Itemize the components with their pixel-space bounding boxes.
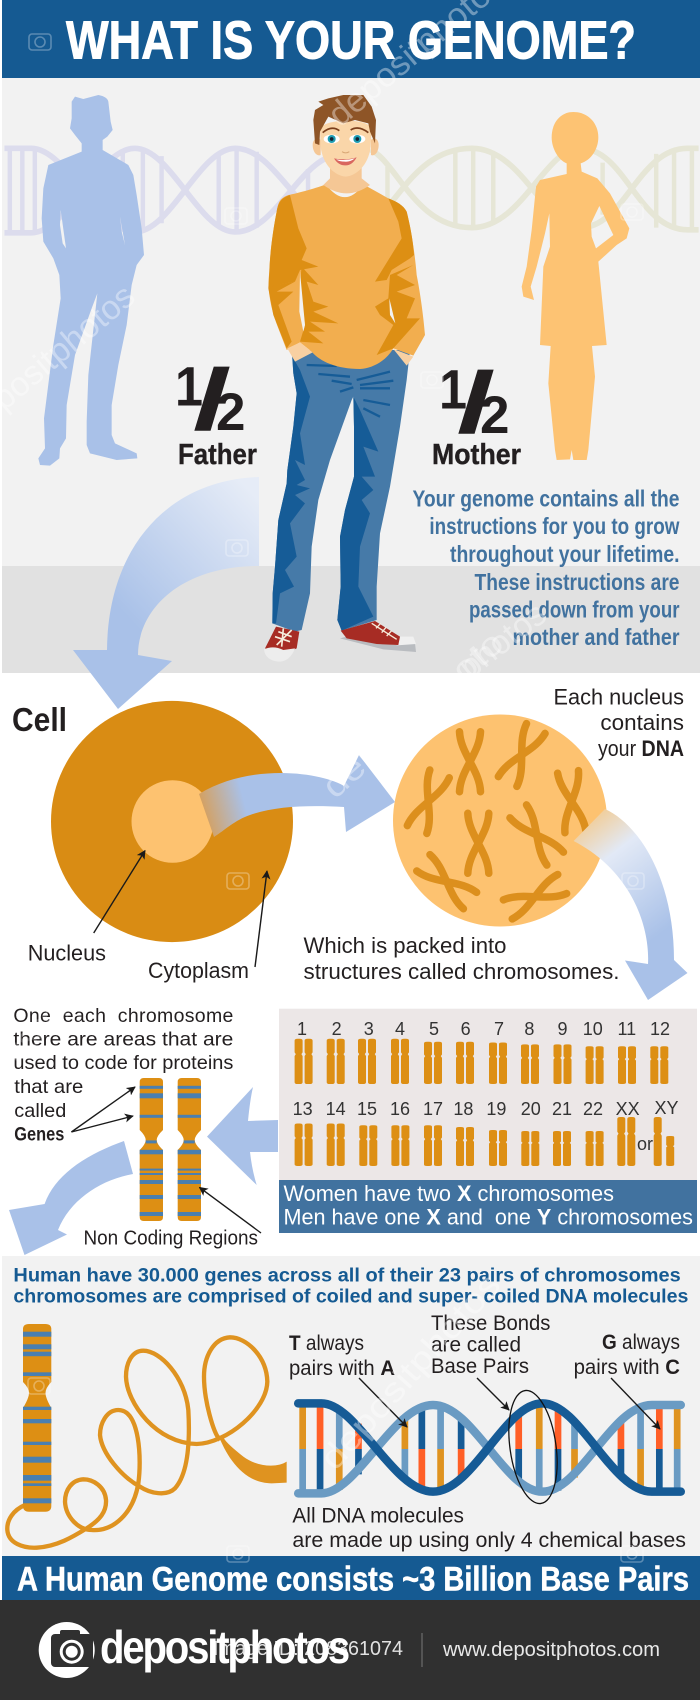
enlarged nucleus with chromosomes — [393, 714, 607, 926]
dna strand: mother side — [371, 148, 699, 230]
label: mother: Mother — [432, 439, 521, 471]
base pair highlight ellipse — [502, 1387, 564, 1507]
chart numbers: 11 — [617, 1019, 636, 1039]
text: each nucleus contains your dna — [554, 685, 684, 761]
man: nose — [342, 152, 349, 153]
label: g pairs with c — [574, 1331, 680, 1429]
chart numbers: 21 — [552, 1099, 572, 1119]
label: g pairs with c: pairs with C — [574, 1356, 680, 1379]
coiled dna strand — [7, 1337, 287, 1548]
watermarks: photos — [452, 595, 554, 686]
label: cytoplasm: Cytoplasm — [148, 958, 249, 983]
chromosome beside coil — [23, 1324, 51, 1512]
dna double helix — [298, 1403, 681, 1494]
large chromosome pair — [140, 1078, 201, 1221]
fraction: mother: / — [457, 355, 495, 451]
text: each nucleus contains your dna: Each nucleus — [554, 685, 684, 710]
man: hair — [313, 95, 376, 145]
fraction: father: / — [193, 352, 231, 448]
dark helix strand — [298, 1403, 681, 1492]
heading: cell: Cell — [12, 701, 67, 738]
image id: Image ID: 208361074 — [213, 1638, 403, 1660]
father silhouette — [38, 95, 144, 466]
man: eyebrows — [323, 128, 368, 133]
man: left shoe — [264, 627, 299, 662]
watermarks: depositphoto — [315, 624, 511, 806]
man: neck — [323, 162, 370, 193]
arrow: nucleus to chromosomes — [574, 809, 688, 1000]
man: hands — [287, 342, 413, 366]
text: genes explanation — [13, 1005, 234, 1145]
chart numbers: 13 — [293, 1099, 313, 1119]
man: gaps between arms and body — [299, 272, 395, 332]
man: ears — [313, 138, 379, 155]
text: each nucleus contains your dna: your DNA — [598, 736, 684, 761]
label: base pairs: are called — [431, 1334, 521, 1357]
chart numbers: 18 — [453, 1099, 473, 1119]
chromosome x shapes — [407, 724, 586, 919]
label: nucleus — [28, 851, 145, 966]
chart numbers: or — [637, 1134, 653, 1154]
chart numbers: 19 — [486, 1099, 506, 1119]
chart numbers: 4 — [395, 1019, 405, 1039]
heading: genes across chromosomes: chromosomes are comprised of coiled and super- coiled DNA molecules — [13, 1287, 688, 1308]
fraction: mother: 2 — [480, 386, 509, 445]
chart numbers: 7 — [494, 1019, 504, 1039]
chart numbers: 12 — [650, 1019, 670, 1039]
label: cytoplasm — [148, 871, 267, 983]
text: packed into chromosomes — [304, 933, 620, 984]
man: right shoe — [340, 621, 416, 652]
label: base pairs — [431, 1312, 550, 1410]
chart numbers: 2 — [332, 1019, 342, 1039]
arrow: nucleus to enlarged nucleus — [199, 755, 395, 837]
man: jeans and shoes — [264, 350, 416, 662]
chart numbers: 16 — [390, 1099, 410, 1119]
man: mouth — [334, 157, 357, 165]
footer — [0, 1600, 700, 1700]
heading: genes across chromosomes — [13, 1266, 688, 1308]
label: non coding regions: Non Coding Regions — [84, 1228, 258, 1250]
man figure — [264, 95, 425, 662]
man: left eye — [324, 135, 340, 143]
arrow: genes to dna — [9, 1141, 133, 1255]
label: base pairs: Base Pairs — [431, 1355, 529, 1378]
sex chromosome note — [279, 1180, 697, 1233]
chart numbers: 8 — [524, 1019, 534, 1039]
cytoplasm — [51, 701, 293, 942]
man: face — [320, 121, 372, 177]
fraction: father — [175, 352, 245, 448]
sex chromosome note: Men have one X and one Y chromosomes — [284, 1205, 693, 1230]
sex chromosome note: Women have two X chromosomes — [284, 1181, 614, 1206]
mother silhouette — [522, 112, 629, 460]
base pair rungs — [303, 1404, 677, 1494]
text: four chemical bases — [292, 1505, 686, 1552]
chart numbers: 10 — [583, 1019, 603, 1039]
nucleus — [132, 780, 214, 863]
text: four chemical bases: are made up using only 4 chemical bases — [292, 1529, 686, 1552]
fraction: mother — [439, 355, 509, 451]
genome explanation text — [412, 486, 680, 650]
label: t pairs with a: pairs with A — [289, 1357, 395, 1380]
chart numbers: 3 — [364, 1019, 374, 1039]
label: nucleus: Nucleus — [28, 940, 106, 966]
logo icon — [39, 1622, 95, 1678]
text: genes explanation: used to code for proteins — [13, 1052, 234, 1074]
panel: chromosome chart — [279, 1009, 697, 1233]
chart numbers: 20 — [521, 1099, 541, 1119]
text: genes explanation: that are — [14, 1076, 83, 1098]
fraction: mother: 1 — [439, 358, 467, 420]
watermarks: depositphotos — [313, 1266, 508, 1477]
logo wordmark: depositphotos — [100, 1621, 349, 1673]
text: genes explanation: there are areas that are — [13, 1028, 233, 1050]
chart numbers: 22 — [583, 1099, 603, 1119]
light helix strand — [298, 1405, 681, 1493]
man: right eye — [349, 135, 365, 143]
coiled strand thick end — [218, 1435, 287, 1483]
chart numbers — [293, 1019, 679, 1154]
man: sweater — [268, 184, 425, 369]
text: genes explanation: called — [14, 1100, 66, 1122]
label: non coding regions — [84, 1187, 261, 1250]
label: base pairs: These Bonds — [431, 1312, 550, 1335]
chart numbers: 1 — [297, 1019, 307, 1039]
chart numbers: 14 — [326, 1099, 346, 1119]
text: genes explanation: Genes — [14, 1123, 64, 1145]
label: father: Father — [178, 439, 257, 471]
chart numbers: 6 — [461, 1019, 471, 1039]
chart numbers: 17 — [423, 1099, 443, 1119]
chart numbers: 15 — [357, 1099, 377, 1119]
dna strand: father side — [4, 148, 326, 233]
arrow: father to cell — [73, 477, 259, 709]
fraction: father: 1 — [175, 354, 203, 418]
text: packed into chromosomes: structures called chromosomes. — [304, 959, 620, 984]
chart numbers: XX — [616, 1099, 640, 1119]
man: head — [313, 95, 379, 193]
label: g pairs with c: G always — [602, 1331, 680, 1354]
label: t pairs with a: T always — [289, 1332, 364, 1355]
chart numbers: 9 — [557, 1019, 568, 1039]
chart numbers: XY — [654, 1098, 679, 1118]
label: t pairs with a — [289, 1332, 407, 1427]
text: four chemical bases: All DNA molecules — [292, 1505, 464, 1528]
arrow: chart to genes — [207, 1087, 278, 1185]
text: genes explanation: One each chromosome — [13, 1005, 233, 1027]
title banner — [2, 0, 700, 78]
heading: genes across chromosomes: Human have 30.000 genes across all of their 23 pairs of chromosomes — [13, 1266, 681, 1287]
text: packed into chromosomes: Which is packed into — [304, 933, 506, 958]
website url: www.depositphotos.com — [442, 1639, 660, 1661]
chart numbers: 5 — [429, 1019, 439, 1039]
fraction: father: 2 — [216, 383, 245, 442]
text: each nucleus contains your dna: contains — [600, 710, 684, 735]
arrows: genes callout — [71, 1087, 135, 1132]
cell diagram — [51, 701, 293, 942]
chromosome pairs — [295, 1039, 674, 1166]
